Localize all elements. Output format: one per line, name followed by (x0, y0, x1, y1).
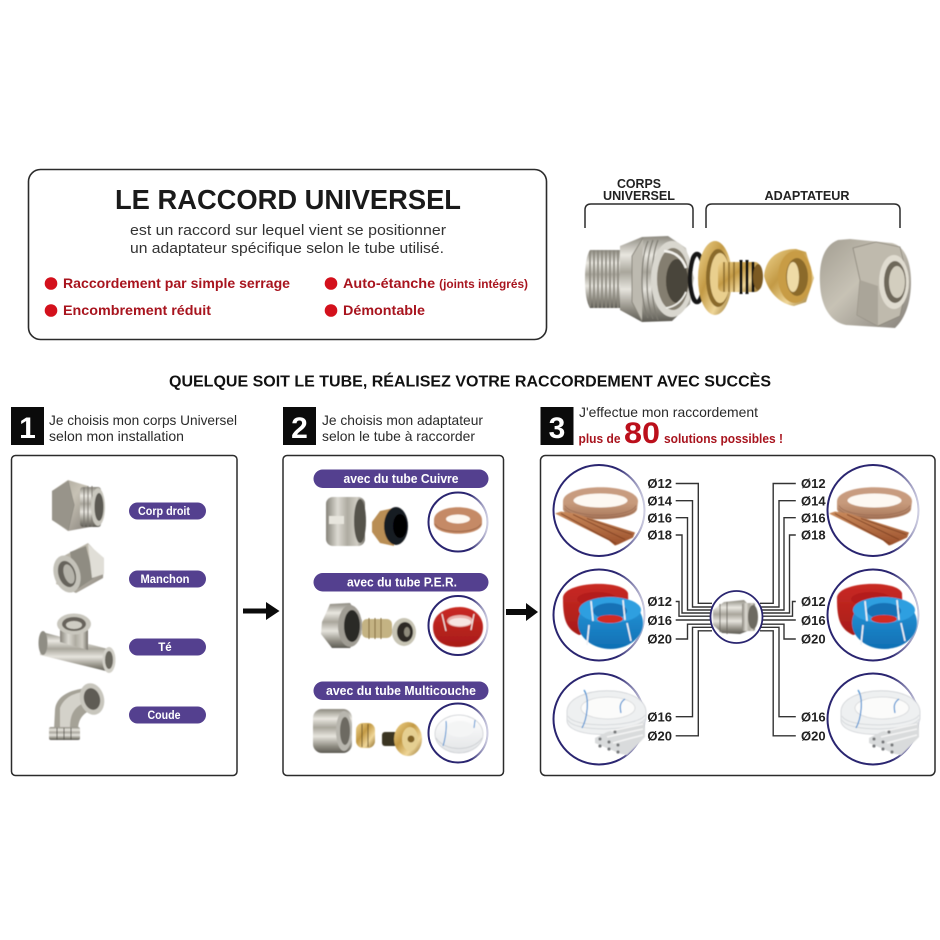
circle: cuivre droite (828, 465, 918, 556)
arrow: step 1 to step 2 (243, 602, 280, 620)
circle: cuivre gauche (554, 465, 644, 556)
pill: tube per: avec du tube P.E.R. (347, 576, 457, 590)
photo: corp droit (52, 480, 105, 531)
circle: multicouche droite (828, 674, 920, 764)
panel 1: corps (12, 456, 237, 776)
photo: adaptateur multicouche (313, 709, 422, 756)
step 2 heading: Je choisis mon adaptateur (322, 412, 483, 428)
photo: manchon (49, 543, 104, 596)
diameter labels left: Ø14 (647, 494, 673, 508)
step 3 heading: 80 (624, 417, 660, 450)
pill: tube cuivre: avec du tube Cuivre (344, 472, 459, 486)
pill: corp droit: Corp droit (138, 506, 190, 518)
diameter labels right: Ø12 (801, 476, 826, 491)
step 1 heading (11, 407, 237, 445)
bullet: raccordement par simple serrage: Raccordement par simple serrage (63, 275, 290, 291)
description text (130, 222, 446, 257)
diameter labels left: Ø20 (647, 728, 672, 744)
pill: tube multicouche: avec du tube Multicouche (326, 684, 476, 698)
connector lines (676, 484, 796, 736)
circle: multicouche gauche (554, 674, 646, 764)
step 3 heading: 3 (549, 412, 565, 445)
step 3 heading: solutions possibles ! (664, 432, 783, 446)
step 2 heading: selon le tube à raccorder (322, 428, 475, 444)
step 2 heading: 2 (291, 412, 308, 445)
step 1 heading: Je choisis mon corps Universel (49, 412, 237, 428)
threaded end (585, 250, 624, 308)
panel 3: solutions (540, 456, 935, 776)
diameter labels left (647, 476, 673, 744)
pill: coude (129, 706, 206, 724)
bullet: encombrement réduit: Encombrement réduit (63, 302, 211, 318)
pill: manchon: Manchon (140, 574, 190, 586)
stem (718, 262, 760, 292)
diameter labels right: Ø12 (801, 594, 826, 609)
nut (820, 239, 911, 328)
pill: tube multicouche (314, 682, 488, 700)
label: adaptateur: ADAPTATEUR (764, 188, 850, 203)
description text: est un raccord sur lequel vient se positionner (130, 222, 446, 239)
photo: exploded fitting (585, 236, 911, 328)
pill: té (129, 638, 206, 656)
circle: cuivre (428, 492, 488, 552)
step 2 heading (283, 407, 483, 445)
circle: per droite (828, 570, 918, 660)
bullet: auto-étanche: Auto-étanche (joints intégrés) (343, 275, 528, 291)
diameter labels right: Ø16 (801, 710, 826, 724)
step 1 heading: 1 (19, 412, 36, 445)
description text: un adaptateur spécifique selon le tube utilisé. (130, 240, 444, 257)
diameter labels left: Ø12 (647, 594, 672, 609)
photo: adaptateur per (321, 603, 416, 648)
panel 2: adaptateurs (283, 456, 504, 776)
diameter labels left: Ø12 (647, 476, 672, 491)
diameter labels left: Ø16 (647, 510, 672, 526)
diameter labels left: Ø16 (647, 710, 672, 724)
diameter labels left: Ø20 (647, 632, 672, 646)
pill: coude: Coude (148, 710, 180, 722)
photo: té (38, 614, 116, 673)
diameter labels right: Ø16 (801, 613, 826, 628)
bracket: adaptateur (706, 204, 900, 228)
step 3 heading: J'effectue mon raccordement (579, 404, 758, 420)
heading: QUELQUE SOIT LE TUBE, RÉALISEZ VOTRE RACCORDEMENT AVEC SUCCÈS (169, 372, 771, 390)
label: corps universel: CORPS (617, 176, 661, 191)
circle: multicouche (428, 704, 488, 762)
circle: per gauche (554, 570, 644, 660)
step 1 heading: selon mon installation (49, 428, 184, 444)
o-ring (690, 254, 704, 302)
title: LE RACCORD UNIVERSEL (115, 184, 461, 215)
brass flange (698, 241, 732, 315)
panel: le raccord universel (28, 170, 546, 340)
step 3 heading (540, 404, 783, 450)
label: corps universel: UNIVERSEL (603, 188, 675, 203)
photo: adaptateur cuivre (326, 497, 408, 546)
pill: tube cuivre (314, 470, 488, 488)
diameter labels right (801, 476, 826, 744)
label: corps universel (603, 176, 675, 203)
arrow: step 2 to step 3 (506, 603, 538, 621)
bullet: démontable: Démontable (343, 302, 425, 318)
diameter labels right: Ø18 (801, 528, 826, 542)
step 3 heading: plus de (578, 432, 621, 446)
circle: per (428, 596, 488, 655)
pill: té: Té (158, 642, 172, 654)
diameter labels right: Ø20 (801, 728, 826, 744)
bracket: corps universel (585, 204, 693, 228)
pill: corp droit (129, 502, 206, 520)
pill: tube per (314, 573, 488, 592)
photo: coude (49, 680, 108, 740)
diameter labels right: Ø16 (801, 510, 826, 526)
brass ferrule (764, 249, 814, 306)
hex body (620, 236, 694, 322)
diameter labels right: Ø14 (801, 494, 826, 508)
diameter labels left: Ø16 (647, 613, 672, 628)
diameter labels left: Ø18 (647, 528, 672, 542)
pill: manchon (129, 570, 206, 588)
diameter labels right: Ø20 (801, 632, 826, 646)
center fitting (710, 591, 762, 643)
